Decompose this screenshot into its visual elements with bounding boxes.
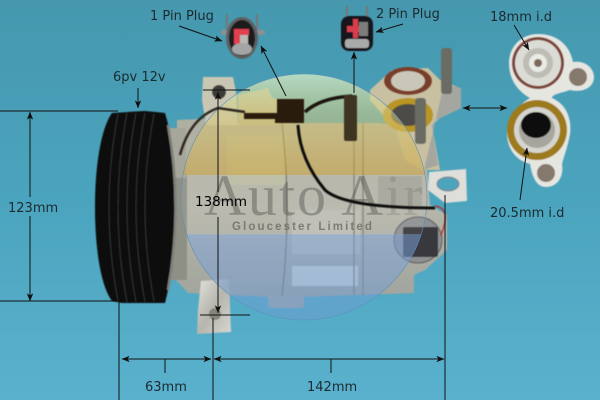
lower seal ring (507, 100, 567, 160)
length label: 142mm (307, 380, 357, 395)
gold boss on top (238, 88, 292, 125)
upper lobe bolt (569, 68, 587, 86)
lower mounting lug (197, 279, 231, 334)
18mm arrow (514, 25, 529, 50)
watermark disc (181, 74, 427, 320)
lower lobe bolt (537, 164, 555, 182)
wiring plugs (244, 99, 304, 123)
upper mounting lug (202, 77, 238, 125)
height label: 123mm (8, 201, 58, 216)
mounting height label: 138mm (195, 194, 247, 210)
belt label: 6pv 12v (113, 70, 166, 85)
clutch housing (165, 175, 187, 280)
63mm dimension (119, 300, 213, 400)
rear mounting ear (428, 169, 467, 203)
watermark text: Auto Air (204, 163, 425, 228)
flange plate (507, 34, 594, 187)
compressor body (176, 118, 447, 297)
wiring (180, 95, 445, 235)
depth label: 63mm (145, 380, 187, 395)
belt arrow (137, 88, 139, 108)
body castings (227, 135, 287, 185)
2 pin plug arrows (354, 24, 403, 93)
electrical connector (394, 217, 442, 263)
20.5mm label: 20.5mm i.d (490, 206, 564, 221)
138mm dimension (200, 90, 250, 315)
2 pin plug label: 2 Pin Plug (376, 7, 440, 22)
port offset arrow (463, 107, 507, 109)
lower port ring (383, 98, 433, 132)
1 pin plug icon (221, 14, 265, 59)
pulley (95, 111, 176, 303)
upper port ring (384, 67, 432, 95)
watermark text: Gloucester Limited (232, 221, 374, 233)
18mm label: 18mm i.d (490, 10, 552, 25)
upper seal ring (512, 37, 564, 89)
142mm dimension (214, 195, 445, 400)
1 pin plug label: 1 Pin Plug (150, 9, 214, 24)
1 pin plug arrows (179, 26, 286, 96)
threaded studs (441, 48, 452, 94)
compressor photo (95, 48, 467, 334)
port manifold (370, 68, 461, 170)
123mm dimension (0, 111, 118, 301)
2 pin plug icon (341, 6, 373, 51)
port close-up (507, 34, 594, 187)
20.5mm arrow (520, 148, 527, 200)
